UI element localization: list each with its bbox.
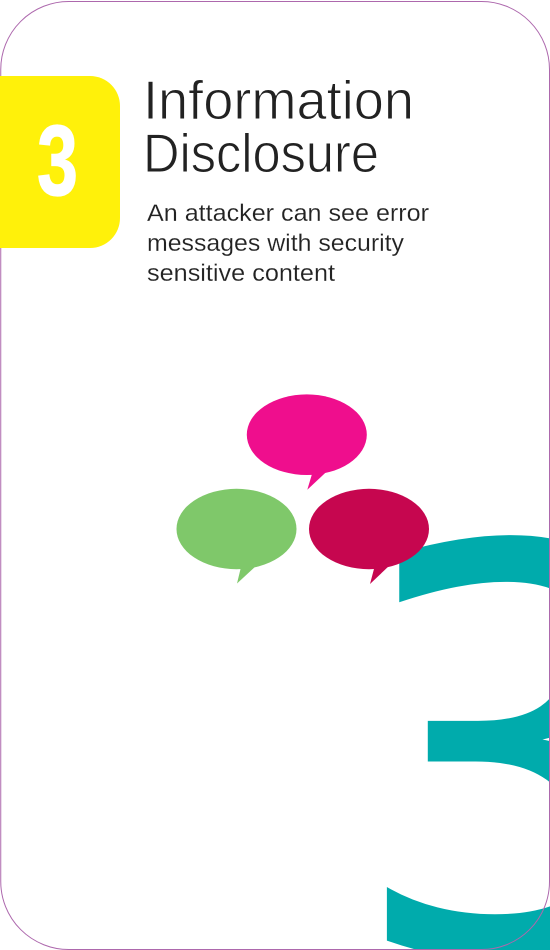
decorative large numeral 3: [386, 535, 550, 950]
description: messages with security: [147, 230, 404, 257]
speech bubble: crimson: [309, 489, 429, 584]
description: [147, 200, 429, 287]
title: [143, 69, 414, 184]
speech bubble: green: [176, 489, 296, 584]
badge number: 3: [37, 105, 78, 217]
description: sensitive content: [147, 260, 335, 287]
title: Information: [143, 69, 414, 131]
badge background: [0, 76, 120, 248]
title: Disclosure: [143, 122, 379, 184]
speech bubble: pink: [247, 394, 367, 490]
description: An attacker can see error: [147, 200, 429, 227]
number badge: [0, 76, 120, 248]
